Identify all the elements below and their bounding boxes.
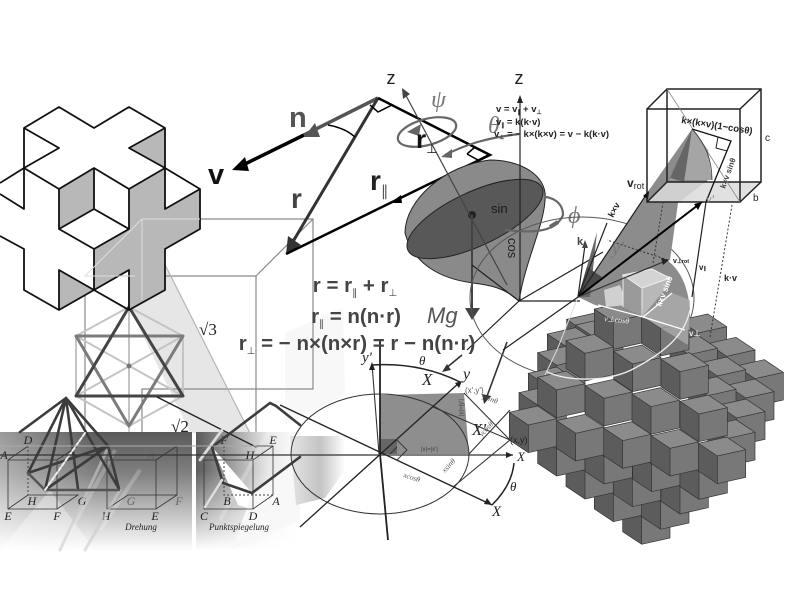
formula block top: ⊥ [537, 109, 542, 116]
panel letters and captions: A [271, 494, 280, 508]
panel letters and captions: H [245, 448, 256, 462]
large gray circle arc [470, 217, 694, 379]
vector labels n v r: ∥ [381, 183, 388, 200]
rigid body labels: z [386, 68, 396, 88]
formula block top: = k(k·v) [504, 117, 540, 128]
vector labels n v r: n [289, 102, 307, 134]
panel letters and captions: F [219, 433, 228, 447]
box and rotation labels: k×v sinθ [655, 275, 675, 308]
rigid body labels: ϕ [568, 203, 580, 229]
vector labels n v r [208, 102, 388, 214]
box and rotation labels: y' [610, 238, 625, 258]
rotated diagram labels: |y|=|y'| [459, 399, 465, 416]
rigid body labels: z [514, 68, 524, 88]
star of David wireframe [76, 307, 183, 426]
formula block top: v [494, 129, 499, 140]
rotation formulas: = − n×(n×r) = r − n(n·r) [255, 332, 475, 355]
rotated diagram labels: X' [471, 420, 486, 439]
rotated diagram labels: ycosθ [476, 420, 495, 439]
rotated diagram labels: y [461, 366, 471, 383]
rotated diagram labels: |x|=|x'| [421, 447, 438, 453]
formula block top: ∥ [517, 109, 520, 116]
(x,y) label on cube: (x,y) [510, 435, 528, 445]
rotation fan arrows [503, 191, 732, 350]
panel letters and captions: E [268, 433, 277, 447]
box and rotation labels: v' [706, 192, 714, 206]
panel letters and captions: Drehung [124, 522, 157, 532]
rotation formulas: ∥ [319, 319, 324, 330]
rigid body labels: θ [488, 113, 500, 139]
rotation formulas: ∥ [352, 288, 357, 299]
box and rotation labels: k×v sinθ [718, 157, 738, 190]
isometric cross figure [0, 107, 200, 310]
rotated box wireframe [647, 89, 761, 202]
box and rotation labels: v⊥ [689, 329, 700, 338]
panel letters and captions: E [150, 509, 159, 523]
panel letters and captions: G [78, 494, 87, 508]
formula block top [494, 104, 609, 141]
rigid body labels: r [416, 124, 426, 154]
rigid body blob [397, 160, 553, 301]
box and rotation labels: k×(k×v)(1−cosθ) [681, 115, 753, 137]
vector labels n v r: r [370, 165, 381, 196]
formula block top: + v [520, 104, 537, 115]
box and rotation labels: c [765, 133, 770, 144]
box and rotation labels: rot [634, 181, 645, 191]
rotation formulas: = n(n·r) [324, 305, 401, 328]
rotation formulas: r [311, 305, 319, 328]
rotated diagram labels: X [421, 370, 433, 389]
formula block top: ⊥ [499, 134, 505, 141]
panel letters and captions: F [174, 494, 183, 508]
box and rotation labels: k·v [724, 273, 737, 283]
rotated diagram labels: (x',y') [465, 386, 484, 395]
rigid body labels [386, 68, 580, 328]
background cube wireframe with light triangle [85, 219, 345, 447]
rotated diagram labels: θ [510, 479, 517, 494]
panel letters and captions: E [3, 509, 12, 523]
rotated diagram labels: X [516, 449, 526, 464]
rotation vector diagram [232, 98, 490, 254]
rigid body labels: cos [505, 238, 520, 259]
formula block top: v = v [496, 104, 517, 115]
isometric cube stack [509, 303, 783, 544]
panel letters and captions: H [101, 509, 112, 523]
faint cube lines over cross [85, 219, 200, 300]
panel letters and captions: C [200, 509, 209, 523]
panel letters and captions: G [127, 494, 136, 508]
box and rotation labels: v⊥cosθ [604, 314, 630, 326]
rigid body labels: ⊥ [426, 141, 437, 156]
gray wedge and dome of rotation [545, 129, 712, 379]
rigid body labels: sin [491, 201, 508, 216]
formula block top: v [496, 117, 501, 128]
rigid body labels: ψ [431, 87, 447, 113]
rotated diagram labels: xsinθ [439, 456, 457, 475]
panel letters and captions: B [223, 494, 231, 508]
rigid body labels: Mg [427, 303, 458, 328]
box and rotation labels [577, 115, 770, 338]
panel letters and captions: H [27, 494, 38, 508]
rotation formulas: r = r [313, 274, 352, 297]
rotated diagram labels: xcosθ [401, 470, 422, 484]
panel letters and captions: D [248, 509, 258, 523]
formula block top: = − k×(k×v) = v − k(k·v) [505, 129, 609, 140]
rotated coordinates diagram [0, 340, 514, 540]
rotated diagram labels: θ [419, 353, 426, 368]
rotation formulas [239, 274, 475, 357]
rigid body axes and arrows [395, 88, 603, 350]
panel letters and captions: A [146, 448, 155, 462]
rotated diagram labels: X [491, 504, 502, 520]
box and rotation labels: v∥ [699, 263, 706, 272]
rotation formulas: ⊥ [388, 288, 397, 299]
sqrt labels: √2 [171, 417, 189, 436]
rotated diagram labels [360, 350, 526, 520]
rotation formulas: r [239, 332, 247, 355]
panel letters and captions [0, 433, 280, 532]
panel letters and captions: A [0, 448, 8, 462]
box and rotation labels: v [627, 176, 634, 190]
rotated diagram labels: ysinθ [480, 391, 500, 406]
rotation formulas: ⊥ [247, 346, 255, 357]
vector labels n v r: r [291, 183, 302, 214]
panel letters and captions: F [52, 509, 61, 523]
box and rotation labels: v⊥rot [673, 258, 689, 265]
box and rotation labels: k×v [606, 201, 622, 219]
pyramid wireframes in panels [0, 397, 300, 550]
panel letters and captions: Punktspiegelung [208, 522, 269, 532]
top clip mask for z labels [370, 60, 540, 73]
rotated diagram labels: y' [360, 350, 373, 366]
rotation formulas: + r [357, 274, 388, 297]
sqrt labels [171, 320, 217, 436]
box and rotation labels: b [753, 193, 759, 204]
sqrt labels: √3 [199, 320, 217, 339]
box and rotation labels: k [577, 236, 584, 248]
gray panels: Drehung and Punktspiegelung [0, 430, 345, 550]
panel letters and captions: D [23, 433, 33, 447]
vector labels n v r: v [208, 159, 224, 191]
formula block top: ∥ [501, 122, 504, 129]
